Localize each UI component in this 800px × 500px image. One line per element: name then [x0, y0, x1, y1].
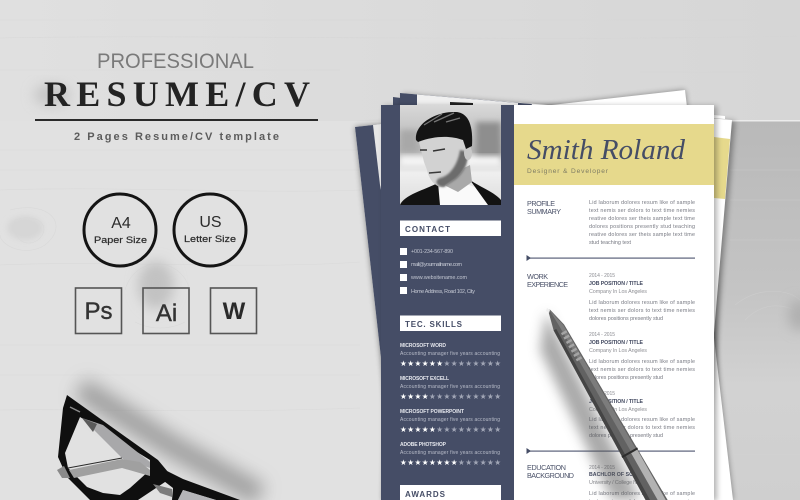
- icon: photoshop: [76, 288, 122, 334]
- skill: powerpoint: MICROSOFT POWERPOINT: [400, 409, 464, 415]
- skill: excel: MICROSOFT EXCELL: [400, 376, 449, 382]
- profile summary: PROFILE: [527, 199, 555, 208]
- heading: professional: PROFESSIONAL: [97, 50, 254, 73]
- back sheets: [355, 90, 735, 500]
- job 1: Company In Los Angeles: [589, 289, 647, 295]
- contact heading: CONTACT: [405, 225, 450, 234]
- profile summary: reative dolores ser theis sample text time: [589, 216, 695, 222]
- skill: photoshop: ADOBE PHOTSHOP: [400, 442, 447, 448]
- contact list: Home Address, Road 102, City: [411, 289, 475, 295]
- profile summary: reative dolores ser theis sample text time: [589, 232, 695, 238]
- work experience: EXPERIENCE: [527, 280, 568, 289]
- job 2: Company In Los Angeles: [589, 348, 647, 354]
- skill: word: [400, 343, 501, 368]
- education background: [527, 463, 695, 500]
- job 2: [589, 332, 695, 381]
- nose pad: [153, 484, 172, 497]
- job 2: Lid laborum dolores resum like of sample: [589, 359, 695, 365]
- profile summary: [527, 199, 695, 246]
- badge: A4 paper size: Paper Size: [94, 235, 147, 246]
- job 2: text nemis ser dolors to text time nemies: [589, 367, 695, 373]
- awards heading: AWARDS: [405, 490, 446, 499]
- profile summary: dolores positions presently stud teaching: [589, 224, 695, 230]
- neck: [446, 165, 472, 192]
- name banner: Smith Roland: [527, 134, 685, 166]
- left frame: [58, 395, 168, 500]
- sheet rotated counter clockwise: [355, 90, 733, 500]
- pen shadow: [540, 312, 640, 500]
- job 1: JOB POSITION / TITLE: [589, 281, 644, 287]
- contact list: mail@yourmailname.com: [411, 262, 462, 268]
- third sheet corner: [393, 97, 401, 110]
- divider: work: [526, 255, 695, 261]
- sheet rotated clockwise: [383, 93, 735, 500]
- profile summary: text nemis ser dolors to text time nemies: [589, 208, 695, 214]
- jacket left: [400, 183, 440, 205]
- sidebar: [381, 105, 514, 500]
- mouth: [429, 172, 441, 173]
- skill: photoshop: ★★★★★★★★★★★★★★: [400, 458, 501, 467]
- contact list: +001-234-567-890: [411, 249, 453, 255]
- job 3: text nemis ser dolors to text time nemies: [589, 425, 695, 431]
- job 1: text nemis ser dolors to text time nemies: [589, 308, 695, 314]
- badge: A4 paper size: [84, 194, 156, 266]
- divider: education: [526, 448, 695, 454]
- education background: University / College Name: [589, 480, 647, 486]
- pen body: [548, 310, 668, 500]
- job 3: [589, 391, 695, 439]
- pen grip: [561, 330, 582, 361]
- skill: excel: Accounting manager five years accounting: [400, 384, 500, 390]
- job 3: Company In Los Angeles: [589, 407, 647, 413]
- icon: illustrator: [143, 288, 189, 334]
- contact list: [400, 248, 475, 295]
- job 1: Lid laborum dolores resum like of sample: [589, 300, 695, 306]
- front sheet: [381, 105, 717, 500]
- title: [35, 50, 318, 143]
- job 3: Lid laborum dolores resum like of sample: [589, 417, 695, 423]
- skill: word: MICROSOFT WORD: [400, 343, 446, 349]
- face: [419, 137, 468, 187]
- skill: word: ★★★★★★★★★★★★★★: [400, 359, 501, 368]
- badge: US letter size: [174, 194, 246, 266]
- icon: word: [210, 288, 256, 334]
- beard shadow: [437, 150, 468, 187]
- right frame and bridge: [160, 470, 240, 500]
- job 3: 2014 - 2015: [589, 391, 615, 397]
- contact list: www.websitename.com: [410, 275, 468, 281]
- badge: US letter size: Letter Size: [184, 234, 236, 245]
- glasses: [57, 388, 260, 500]
- hair: [416, 112, 472, 149]
- heading: resume cv: RESUME/CV: [44, 74, 310, 114]
- badge: A4 paper size: A4: [111, 215, 131, 232]
- subtitle: 2 Pages Resume/CV template: [74, 131, 279, 143]
- work experience: WORK: [527, 272, 548, 281]
- education background: BACHLOR OF SCIENCE: [589, 472, 650, 478]
- pen: [540, 305, 676, 500]
- badge: US letter size: US: [199, 214, 222, 231]
- skills heading: TEC. SKILLS: [405, 320, 463, 329]
- pen clip: [631, 450, 667, 500]
- profile summary: SUMMARY: [527, 207, 561, 216]
- skill: powerpoint: Accounting manager five years accounting: [400, 417, 500, 423]
- profile summary: Lid laborum dolores resum like of sample: [589, 200, 695, 206]
- icon: illustrator: Ai: [156, 300, 177, 327]
- contact heading: [400, 220, 501, 236]
- icon: word: W: [223, 298, 246, 325]
- ear: [464, 146, 472, 160]
- skill: powerpoint: ★★★★★★★★★★★★★★: [400, 425, 501, 434]
- jacket right: [470, 180, 501, 205]
- job 2: dolores positions presently stud: [589, 375, 663, 381]
- name banner: [514, 124, 714, 185]
- skill: photoshop: [400, 442, 501, 467]
- skill: powerpoint: [400, 409, 501, 434]
- education background: EDUCATION: [527, 463, 566, 472]
- awards heading: [400, 485, 501, 500]
- job 1: dolores positions presently stud: [589, 316, 663, 322]
- education background: Lid laborum dolores resum like of sample: [589, 491, 695, 497]
- job 1: 2014 - 2015: [589, 273, 615, 279]
- education background: BACKGROUND: [527, 471, 574, 480]
- profile summary: stud teaching text: [589, 240, 632, 246]
- education background: 2014 - 2015: [589, 465, 615, 471]
- job 2: 2014 - 2015: [589, 332, 615, 338]
- left lens temple reflection: [82, 418, 150, 468]
- skill: excel: ★★★★★★★★★★★★★★: [400, 392, 501, 401]
- icon: photoshop: Ps: [84, 298, 113, 325]
- job 1: [589, 273, 695, 322]
- skill: excel: [400, 376, 501, 401]
- job 3: JOB POSITION / TITLE: [589, 399, 644, 405]
- eyes: [420, 149, 445, 151]
- skill: photoshop: Accounting manager five years accounting: [400, 450, 500, 456]
- skills heading: [400, 316, 501, 331]
- shirt: [439, 185, 488, 205]
- job 2: JOB POSITION / TITLE: [589, 340, 644, 346]
- portrait photo: [400, 105, 501, 205]
- work experience: [527, 272, 695, 439]
- glasses shadow: [80, 388, 260, 495]
- skill: word: Accounting manager five years accounting: [400, 351, 500, 357]
- title rule: [35, 119, 318, 121]
- name banner: Designer & Developer: [527, 168, 609, 175]
- job 3: dolores positions presently stud: [589, 433, 663, 439]
